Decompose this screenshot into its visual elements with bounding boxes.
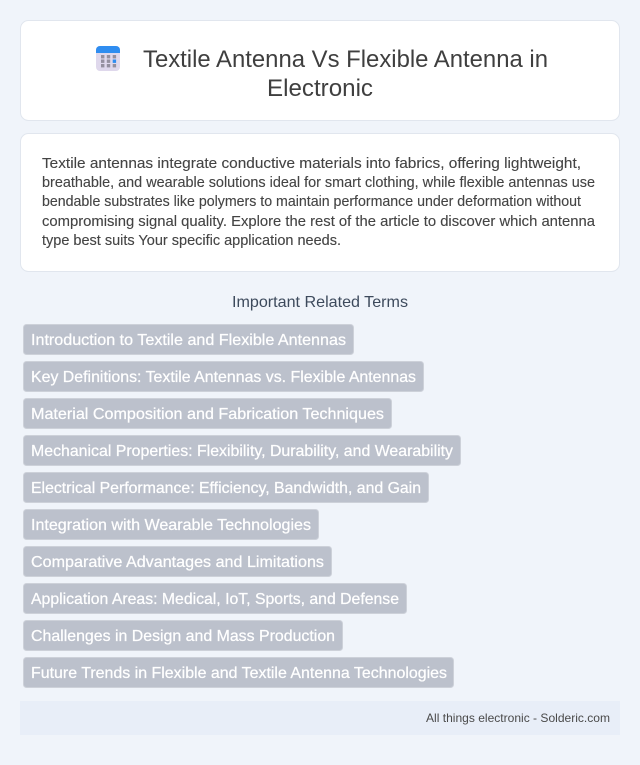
tag 2 (24, 362, 424, 392)
heading: important related terms: Important Related Terms (232, 294, 408, 311)
tag 1: Introduction to Textile and Flexible Antennas (31, 332, 346, 349)
panel: title card (20, 20, 620, 120)
list: related term tags (24, 324, 460, 688)
tag 2: Key Definitions: Textile Antennas vs. Flexible Antennas (31, 369, 416, 386)
tag 7 (24, 546, 332, 576)
tag 4: Mechanical Properties: Flexibility, Durability, and Wearability (31, 443, 453, 460)
tag 5 (24, 472, 428, 502)
text block: summary paragraph: compromising signal quality. Explore the rest of the article to discover which antenna (42, 214, 595, 230)
text block: summary paragraph: breathable, and wearable solutions ideal for smart clothing, while flexible antennas use (42, 175, 595, 191)
text block: summary paragraph: bendable substrates like polymers to maintain performance under deformation without (42, 194, 581, 210)
icon: calendar grid (96, 46, 120, 71)
tag 9: Challenges in Design and Mass Production (31, 628, 335, 645)
tag 6: Integration with Wearable Technologies (31, 517, 311, 534)
footer: All things electronic - Solderic.com (426, 711, 610, 725)
footer (20, 701, 620, 735)
heading: Electronic (267, 75, 373, 102)
panel: introduction text (20, 134, 620, 272)
tag 3 (24, 398, 392, 428)
tag 5: Electrical Performance: Efficiency, Bandwidth, and Gain (31, 480, 421, 497)
tag 1 (24, 324, 354, 354)
heading (143, 46, 548, 102)
tag 10 (24, 658, 454, 688)
tag 8: Application Areas: Medical, IoT, Sports, and Defense (31, 591, 399, 608)
tag 8 (24, 584, 406, 614)
tag 7: Comparative Advantages and Limitations (31, 554, 324, 571)
tag 6 (24, 510, 318, 540)
text block: summary paragraph (42, 156, 595, 249)
tag 9 (24, 620, 342, 650)
tag 3: Material Composition and Fabrication Techniques (31, 406, 384, 423)
heading: Textile Antenna Vs Flexible Antenna in (143, 46, 548, 73)
text block: summary paragraph: Textile antennas integrate conductive materials into fabrics, offering lightweight, (42, 156, 581, 172)
tag 10: Future Trends in Flexible and Textile Antenna Technologies (31, 665, 447, 682)
tag 4 (24, 436, 460, 466)
text block: summary paragraph: type best suits Your specific application needs. (42, 233, 341, 249)
